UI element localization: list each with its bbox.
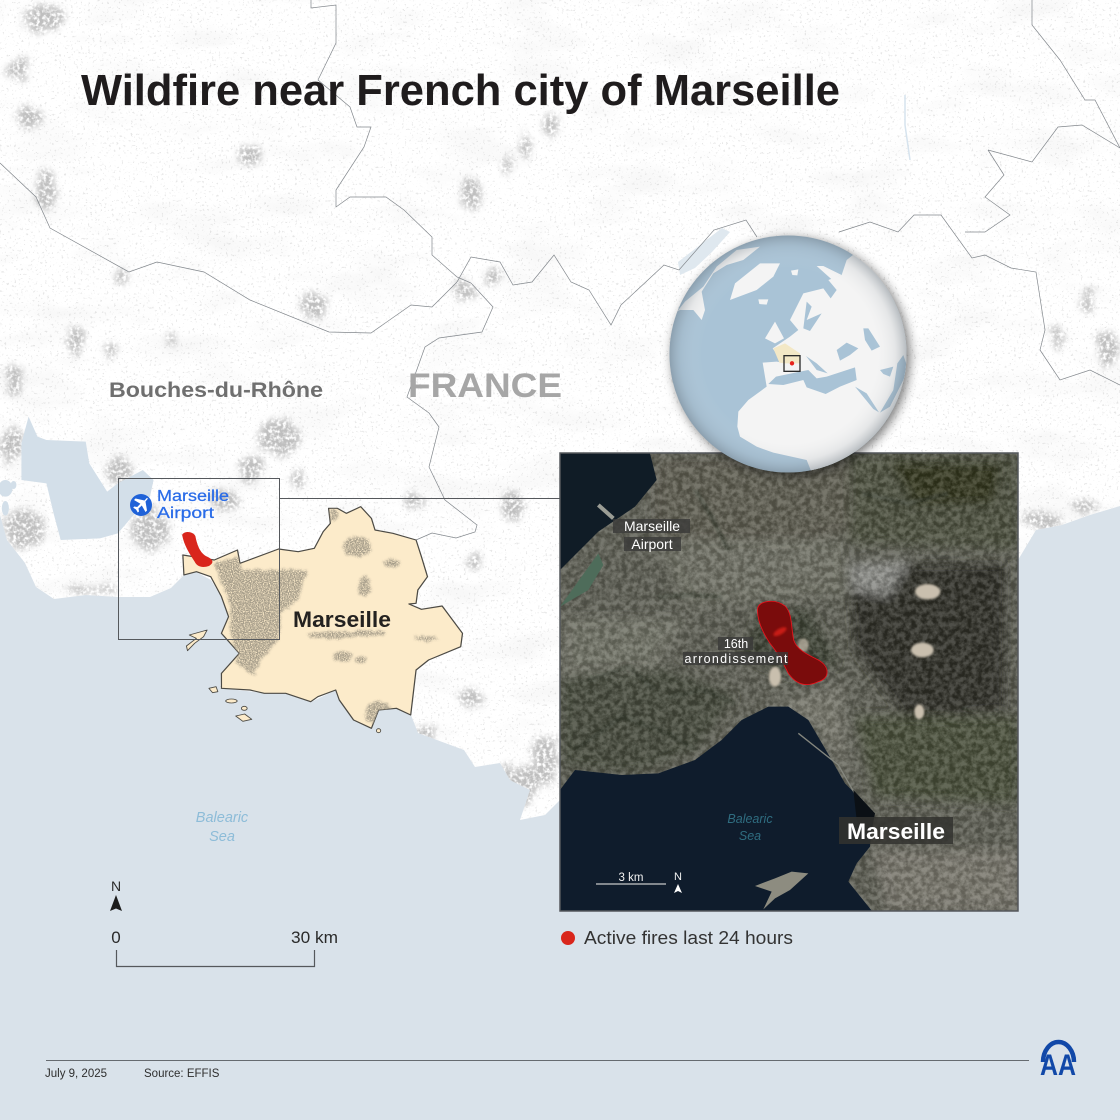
icon: airport <box>130 494 152 516</box>
satellite label: Marseille Airport: Airport <box>631 536 673 552</box>
satellite land base <box>560 453 1018 911</box>
north arrow and scale bar <box>110 878 338 966</box>
panel border <box>560 453 1018 911</box>
ridge lines <box>575 490 948 750</box>
footer rule <box>46 1060 1029 1062</box>
satellite scale and north arrow: N <box>674 871 682 883</box>
north arrow and scale bar: N <box>111 878 121 894</box>
satellite label: Balearic Sea: Balearic <box>727 812 773 826</box>
France <box>773 343 800 363</box>
fire area on satellite <box>758 601 827 685</box>
quarries <box>769 584 940 719</box>
main sea <box>560 707 872 911</box>
globe land <box>737 255 906 470</box>
footer text <box>45 1068 220 1080</box>
upper sea <box>560 453 657 570</box>
footer text: July 9, 2025 <box>45 1068 107 1080</box>
label: France: FRANCE <box>408 367 562 405</box>
satellite label: Balearic Sea: Sea <box>739 829 761 843</box>
marker dot <box>790 361 794 365</box>
label: Balearic Sea: Balearic <box>196 810 249 826</box>
globe shading <box>669 235 907 473</box>
label: Marseille Airport (blue): Airport <box>157 505 215 522</box>
panel: satellite inset <box>560 453 1018 911</box>
satellite scale and north arrow: 3 km <box>619 872 643 884</box>
satellite label: Marseille Airport: Marseille <box>624 518 680 534</box>
islands <box>186 630 381 733</box>
north arrow and scale bar: 0 <box>111 928 121 947</box>
satellite label: 16th arrondissement: arrondissement <box>684 652 788 666</box>
administrative boundaries <box>0 0 1120 540</box>
title: Wildfire near French city of Marseille <box>81 66 840 115</box>
label: Balearic Sea: Sea <box>209 829 235 845</box>
satellite texture <box>560 453 1018 911</box>
marker box <box>784 356 800 371</box>
land base map <box>0 0 1120 830</box>
lake near globe <box>678 228 730 275</box>
label: Bouches-du-Rhone: Bouches-du-Rhône <box>109 379 323 402</box>
logo: AA: AA <box>1040 1049 1076 1082</box>
urban texture <box>214 509 436 725</box>
river Rhone <box>905 95 910 160</box>
satellite scale and north arrow <box>596 871 682 893</box>
legend: Active fires last 24 hours <box>584 928 793 948</box>
fire area on regional map <box>182 532 212 567</box>
lake: Etang de Berre <box>0 417 154 540</box>
satellite label: 16th arrondissement: 16th <box>724 637 748 651</box>
lagoon <box>560 553 603 607</box>
connector line to inset <box>280 498 560 500</box>
satellite label: Marseille Airport <box>613 518 690 552</box>
Frioul islands <box>755 872 808 909</box>
Marseille polygon <box>183 507 462 728</box>
north arrow and scale bar: 30 km <box>291 928 338 947</box>
globe seas <box>768 302 908 413</box>
locator globe <box>667 235 920 477</box>
satellite label: 16th arrondissement <box>683 637 788 666</box>
Marseille district map <box>183 507 462 733</box>
label: Marseille: Marseille <box>293 607 391 632</box>
satellite label: Marseille: Marseille <box>847 819 945 844</box>
airport runway <box>598 505 613 518</box>
label: Marseille Airport (blue): Marseille <box>157 488 229 505</box>
footer text: Source: EFFIS <box>144 1068 220 1080</box>
inset extent box <box>118 478 280 640</box>
